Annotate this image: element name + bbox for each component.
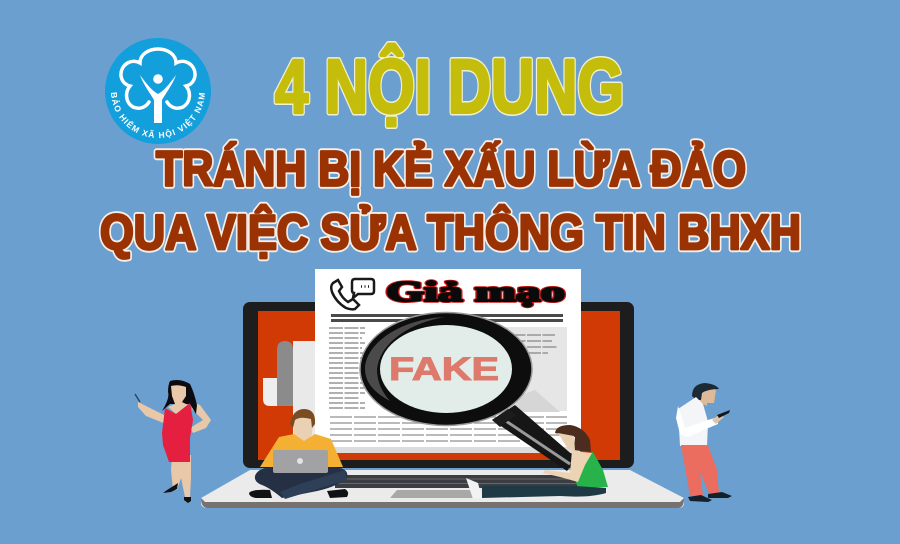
laptop screen frame <box>243 302 634 468</box>
laptop base <box>201 470 684 508</box>
keyboard <box>335 475 585 488</box>
magnifier handle <box>492 405 576 471</box>
magnifier <box>360 312 576 471</box>
lens <box>380 325 512 413</box>
phone and chat icon <box>331 279 374 309</box>
title: 4 NỘI DUNG: 4 NỘI DUNG <box>275 44 624 130</box>
heading line 1: TRÁNH BỊ KẺ XẤU LỪA ĐẢO <box>156 142 746 196</box>
heading line 2: QUA VIỆC SỬA THÔNG TIN BHXH <box>100 205 801 260</box>
heading line 2: QUA VIỆC SỬA THÔNG TIN BHXH <box>100 205 801 260</box>
gray column <box>465 327 567 411</box>
text lines <box>329 328 557 408</box>
woman in red dress <box>135 380 211 503</box>
Giả mạo label: Giả mạo <box>386 276 565 308</box>
Giả mạo label <box>386 276 565 308</box>
logo: Bảo hiểm xã hội Việt Nam <box>105 38 211 144</box>
man with phone <box>676 383 732 502</box>
newspaper <box>315 269 581 453</box>
title: 4 NỘI DUNG: 4 NỘI DUNG <box>275 44 624 130</box>
trackpad <box>390 490 480 498</box>
logo: Bảo hiểm xã hội Việt Nam: BẢO HIỂM XÃ HỘI VIỆT NAM <box>110 92 205 138</box>
Giả mạo label: Giả mạo <box>386 276 565 308</box>
woman in green shirt <box>466 425 608 499</box>
laptop <box>201 302 684 508</box>
red screen <box>258 311 620 460</box>
heading line 1: TRÁNH BỊ KẺ XẤU LỪA ĐẢO <box>156 142 746 196</box>
man with laptop <box>249 409 348 499</box>
headline rules <box>331 314 563 322</box>
FAKE text: FAKE <box>389 351 499 387</box>
scroll paper on screen <box>263 341 333 453</box>
